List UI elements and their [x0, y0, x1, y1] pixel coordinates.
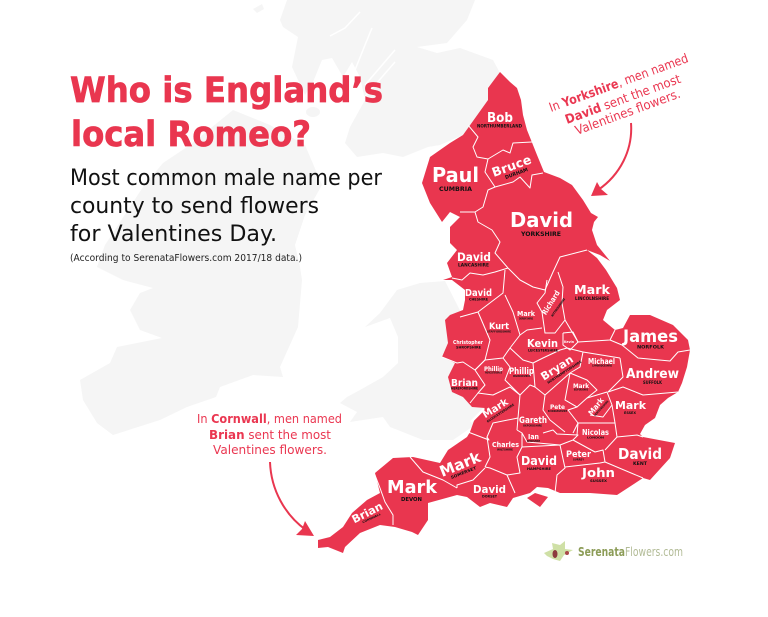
label: Wiltshire: WILTSHIRE: [497, 448, 513, 452]
label: Buckinghamshire: [548, 404, 567, 413]
label: Cheshire: David: [465, 288, 492, 299]
label: Somerset: Mark: [437, 448, 484, 481]
icon: orchid flower: [544, 541, 573, 561]
label: Northumberland: Bob: [487, 110, 513, 126]
label: Surrey: SURREY: [573, 458, 585, 462]
label: Oxfordshire: OXFORDSHIRE: [523, 424, 542, 428]
label: Northumberland: NORTHUMBERLAND: [477, 124, 523, 128]
label: Cambridgeshire: Michael: [588, 357, 615, 366]
label: Dorset: DORSET: [482, 494, 498, 498]
label: Shropshire: SHROPSHIRE: [456, 346, 482, 350]
background map: Scotland, Ireland and Wales: [80, 0, 500, 440]
label: Rutland: Kevin: [564, 340, 574, 344]
label: Cambridgeshire: CAMBRIDGESHIRE: [592, 364, 612, 368]
label: Norfolk: NORFOLK: [637, 344, 665, 350]
label: Lincolnshire: Mark: [574, 282, 611, 297]
label: Sussex: John: [581, 465, 615, 480]
label: Shropshire: [453, 340, 483, 350]
label: Devon: Mark: [387, 477, 438, 498]
label: Herefordshire: HEREFORDSHIRE: [451, 386, 478, 390]
label: Warwickshire: WARWICKSHIRE: [513, 374, 530, 378]
label: Oxfordshire: Gareth: [519, 416, 547, 426]
title: local Romeo?: [71, 115, 311, 155]
label: Bedfordshire: Mark: [573, 382, 590, 390]
label: London: LONDON: [587, 436, 605, 440]
county borders: [375, 125, 690, 525]
label: Essex: ESSEX: [624, 411, 636, 415]
label: Suffolk: Andrew: [626, 366, 679, 382]
subtitle: Most common male name per: [70, 166, 383, 191]
label: Worcestershire: Phillip: [484, 365, 503, 373]
label: Nottinghamshire: Richard: [540, 289, 562, 317]
label: Leicestershire: Kevin: [527, 337, 558, 350]
label: Yorkshire: YORKSHIRE: [520, 231, 561, 238]
label: Gloucestershire: Mark: [481, 397, 511, 421]
label: Berkshire: Ian: [528, 433, 539, 441]
label: Kent: David: [618, 445, 662, 463]
label: Berkshire: BERKSHIRE: [527, 440, 540, 443]
Severn estuary: [471, 409, 484, 422]
England landmass: [318, 72, 690, 553]
label: Kent: KENT: [633, 461, 647, 466]
land: Scotland: [253, 0, 500, 157]
callout: Yorkshire: Valentines flowers.: [573, 87, 683, 139]
label: Staffordshire: STAFFORDSHIRE: [487, 330, 511, 334]
label: Shropshire: Christopher: [453, 340, 483, 346]
label: Buckinghamshire: BUCKINGHAMSHIRE: [548, 410, 567, 413]
label: Cornwall: CORNWALL: [362, 512, 382, 524]
label: Hertfordshire: Mark: [586, 395, 606, 417]
label: Suffolk: SUFFOLK: [643, 380, 663, 385]
label: Hampshire: David: [521, 453, 557, 468]
title: Who is England’s: [70, 71, 383, 111]
label: Northumberland: [477, 110, 523, 128]
logo: SerenataFlowers.com: [544, 541, 683, 561]
callout: Yorkshire: David sent the most: [563, 72, 683, 128]
arrow: Cornwall callout to Cornwall: [270, 462, 314, 536]
label: Cheshire: CHESHIRE: [469, 298, 489, 302]
label: Yorkshire: David: [510, 208, 573, 232]
label: London: Nicolas: [582, 428, 609, 437]
title: [70, 71, 383, 155]
label: Bedfordshire: BEDFORDSHIRE: [574, 388, 588, 392]
logo: SerenataFlowers.com: Flowers.com: [625, 544, 683, 559]
callout: Cornwall: Valentines flowers.: [213, 443, 327, 458]
label: Herefordshire: Brian: [451, 378, 478, 389]
callout: Yorkshire: In Yorkshire, men named: [547, 51, 691, 116]
label: Northamptonshire: Bryan: [538, 353, 576, 383]
callout: Cornwall: In Cornwall, men named: [197, 412, 342, 427]
map: England counties: [318, 72, 690, 553]
source note: (According to SerenataFlowers.com 2017/18 data.): [70, 253, 302, 264]
label: Cornwall: Brian: [350, 500, 385, 526]
label: Worcestershire: WORCESTERSHIRE: [485, 372, 502, 374]
label: Somerset: SOMERSET: [450, 465, 477, 480]
subtitle: [70, 166, 383, 247]
label: Hampshire: HAMPSHIRE: [527, 467, 551, 471]
subtitle: county to send flowers: [70, 194, 319, 219]
label: Staffordshire: Kurt: [489, 322, 509, 332]
callout: Cornwall: [197, 412, 342, 458]
Isle of Wight: [527, 493, 548, 507]
label: Derbyshire: DERBYSHIRE: [519, 316, 533, 320]
callout: Cornwall: Brian sent the most: [209, 428, 331, 443]
label: Surrey: Peter: [566, 450, 592, 460]
label: Norfolk: James: [622, 327, 678, 346]
label: Sussex: SUSSEX: [590, 479, 607, 483]
label: Devon: DEVON: [401, 497, 422, 503]
callout: Yorkshire: [547, 51, 691, 139]
label: Durham: DURHAM: [504, 167, 529, 181]
label: Warwickshire: Phillip: [509, 367, 534, 377]
label: Gloucestershire: GLOUCESTERSHIRE: [486, 403, 515, 424]
label: Durham: Bruce: [490, 152, 533, 180]
label: Lancashire: LANCASHIRE: [458, 262, 489, 268]
logo: SerenataFlowers.com: Serenata: [578, 544, 625, 559]
label: Lancashire: David: [457, 250, 491, 264]
land: Wales: [340, 281, 490, 440]
label: Derbyshire: Mark: [517, 310, 535, 318]
label: Cumbria: Paul: [432, 163, 479, 187]
label: Northamptonshire: NORTHAMPTONSHIRE: [547, 359, 583, 385]
label: Dorset: David: [473, 483, 506, 496]
label: Wiltshire: Charles: [492, 441, 519, 449]
label: Essex: Mark: [615, 400, 647, 412]
label: Leicestershire: LEICESTERSHIRE: [528, 348, 559, 352]
label: Nottinghamshire: NOTTINGHAMSHIRE: [550, 297, 566, 318]
label: Buckinghamshire: Pete: [550, 404, 565, 411]
label: Lincolnshire: LINCOLNSHIRE: [575, 296, 609, 301]
land: Ireland: [80, 110, 322, 435]
subtitle: for Valentines Day.: [70, 222, 277, 247]
label: Hertfordshire: HERTFORDSHIRE: [593, 400, 609, 417]
label: Cumbria: CUMBRIA: [439, 186, 472, 193]
arrow: Yorkshire callout to Yorkshire: [591, 123, 631, 196]
